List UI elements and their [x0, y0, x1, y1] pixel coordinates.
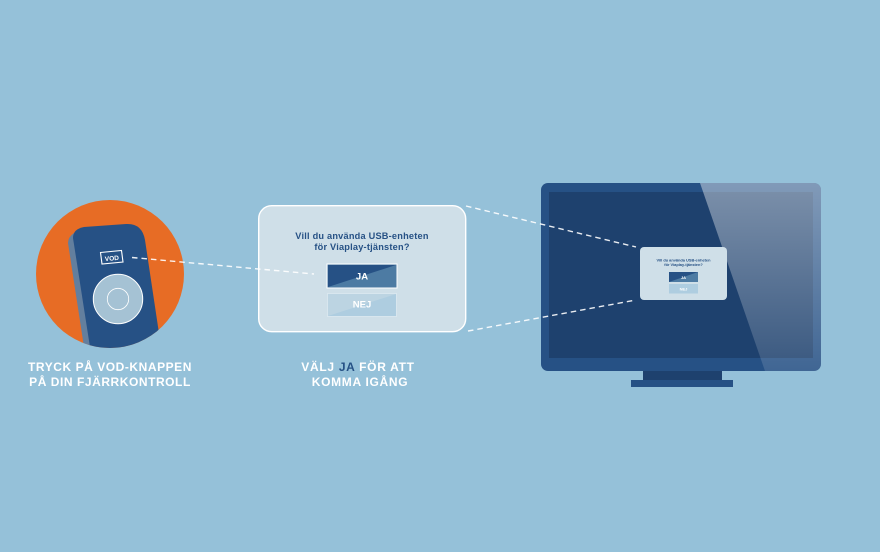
- VOD button: [100, 250, 123, 264]
- dialog box: [259, 206, 466, 332]
- caption: remote: PÅ DIN FJÄRRKONTROLL: [29, 374, 191, 389]
- small dialog on tv: för Viaplay-tjänsten?: [664, 262, 703, 267]
- tv stand: [631, 371, 733, 387]
- dialog question: [295, 231, 429, 252]
- panel: dialog: [259, 206, 466, 332]
- orange circle: [36, 200, 184, 348]
- tv frame: [541, 183, 821, 371]
- screen glare: [700, 183, 821, 371]
- small dialog on tv: [640, 247, 727, 300]
- panel: television: [541, 183, 821, 387]
- VOD button: VOD: [105, 255, 120, 263]
- remote control body: [68, 224, 158, 348]
- small dialog on tv: Vill du använda USB-enheten: [657, 258, 711, 262]
- navigation wheel: [93, 274, 143, 324]
- button: JA: [327, 264, 397, 288]
- panel: remote control illustration: [36, 200, 184, 348]
- caption: dialog: KOMMA IGÅNG: [312, 374, 408, 389]
- small dialog on tv: JA: [681, 275, 686, 280]
- tv screen: [549, 192, 813, 358]
- button: NEJ: NEJ: [353, 300, 371, 310]
- dashed connector lines: [132, 206, 636, 331]
- button: JA: JA: [356, 272, 368, 282]
- caption: remote: TRYCK PÅ VOD-KNAPPEN: [28, 359, 192, 374]
- caption: dialog: VÄLJ JA FÖR ATT: [301, 359, 415, 374]
- caption: remote: [28, 359, 192, 389]
- caption: dialog: [301, 359, 415, 389]
- dialog question: för Viaplay-tjänsten?: [314, 242, 410, 252]
- small dialog on tv: NEJ: [680, 286, 687, 292]
- dialog question: Vill du använda USB-enheten: [295, 231, 429, 241]
- button: NEJ: [328, 294, 396, 316]
